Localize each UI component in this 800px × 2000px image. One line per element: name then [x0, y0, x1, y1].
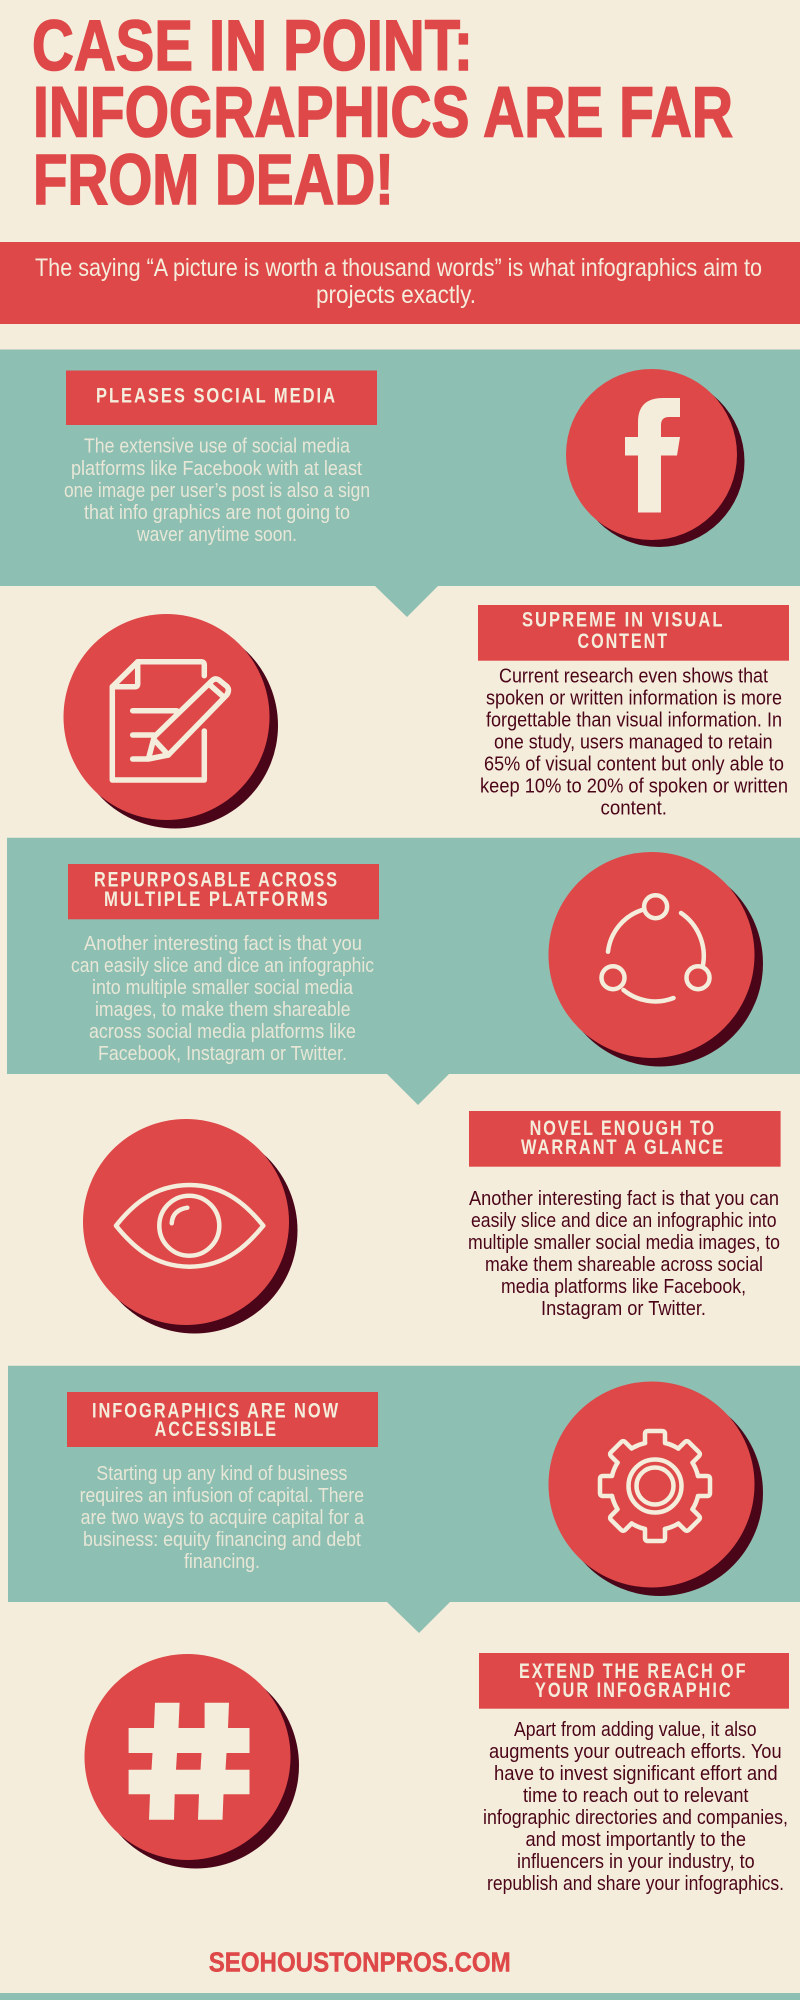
body text: platforms like Facebook with at least — [71, 458, 362, 480]
heading: pleases social media: PLEASES SOCIAL MEDIA — [96, 384, 337, 408]
body text: that info graphics are not going to — [84, 502, 350, 524]
body text: Another interesting fact is that you — [84, 933, 362, 955]
heading: now accessible: ACCESSIBLE — [155, 1418, 278, 1441]
heading: novel enough: WARRANT A GLANCE — [521, 1136, 725, 1159]
icon: facebook — [566, 369, 744, 547]
body text: Current research even shows that — [499, 666, 768, 688]
icon: eye — [83, 1119, 298, 1334]
body text: make them shareable across social — [485, 1254, 763, 1276]
panel: repurposable across multiple platforms — [7, 838, 800, 1105]
body text: media platforms like Facebook, — [501, 1276, 746, 1298]
body text — [480, 666, 788, 820]
body text: can easily slice and dice an infographic — [71, 955, 374, 977]
body text: The extensive use of social media — [84, 436, 351, 458]
body text: content. — [600, 798, 667, 820]
teal band with pointer — [7, 838, 800, 1105]
heading: pleases social media — [66, 370, 377, 425]
body text: Another interesting fact is that you can — [469, 1188, 779, 1210]
heading: supreme in visual content — [478, 605, 789, 661]
heading: novel enough — [469, 1111, 781, 1167]
title: FROM DEAD! — [33, 140, 394, 220]
body text: one study, users managed to retain — [494, 732, 772, 754]
panel: infographics are now accessible — [8, 1366, 800, 1633]
body text: Facebook, Instagram or Twitter. — [98, 1043, 347, 1065]
body text: influencers in your industry, to — [517, 1851, 755, 1873]
body text: Apart from adding value, it also — [514, 1719, 757, 1741]
body text: have to invest significant effort and — [494, 1763, 778, 1785]
heading: repurposable — [68, 864, 379, 919]
body text: Instagram or Twitter. — [541, 1298, 706, 1320]
heading: repurposable: REPURPOSABLE ACROSS — [94, 869, 339, 892]
body text: time to reach out to relevant — [523, 1785, 749, 1807]
heading: extend the reach: YOUR INFOGRAPHIC — [535, 1679, 733, 1702]
body text: one image per user’s post is also a sign — [64, 480, 370, 502]
body text: and most importantly to the — [526, 1829, 746, 1851]
body text: into multiple smaller social media — [92, 977, 354, 999]
panel: extend the reach of your infographic — [84, 1653, 789, 1895]
footer strip — [0, 1993, 800, 2000]
heading: repurposable: MULTIPLE PLATFORMS — [104, 888, 330, 911]
panel: supreme in visual content — [64, 605, 789, 828]
body text — [64, 436, 370, 546]
heading: novel enough: NOVEL ENOUGH TO — [530, 1117, 716, 1140]
title: CASE IN POINT: — [32, 6, 473, 86]
teal band with pointer — [8, 1366, 800, 1633]
body text — [80, 1463, 365, 1573]
teal band with pointer — [0, 350, 800, 617]
intro banner — [0, 242, 800, 324]
body text: images, to make them shareable — [95, 999, 350, 1021]
body text: financing. — [184, 1551, 260, 1573]
title — [32, 6, 733, 220]
body text: business: equity financing and debt — [83, 1529, 361, 1551]
heading: now accessible: INFOGRAPHICS ARE NOW — [92, 1399, 340, 1422]
panel: pleases social media — [0, 350, 800, 617]
icon: gear — [548, 1382, 763, 1596]
body text: requires an infusion of capital. There — [80, 1485, 364, 1507]
footer url: SEOHOUSTONPROS.COM — [209, 1946, 511, 1978]
icon: document and pencil — [64, 614, 278, 828]
body text: across social media platforms like — [89, 1021, 356, 1043]
heading: supreme in visual content: CONTENT — [578, 630, 669, 653]
intro banner: projects exactly. — [316, 281, 476, 309]
heading: extend the reach — [479, 1653, 789, 1709]
body text: are two ways to acquire capital for a — [81, 1507, 365, 1529]
heading: now accessible — [67, 1392, 378, 1447]
body text: waver anytime soon. — [136, 524, 297, 546]
icon: share network — [548, 852, 763, 1066]
panel: novel enough to warrant a glance — [83, 1111, 781, 1334]
icon: hashtag — [84, 1654, 299, 1868]
body text — [468, 1188, 780, 1320]
body text — [483, 1719, 788, 1895]
body text: Starting up any kind of business — [96, 1463, 347, 1485]
body text — [71, 933, 374, 1065]
heading: supreme in visual content: SUPREME IN VISUAL — [522, 609, 724, 632]
